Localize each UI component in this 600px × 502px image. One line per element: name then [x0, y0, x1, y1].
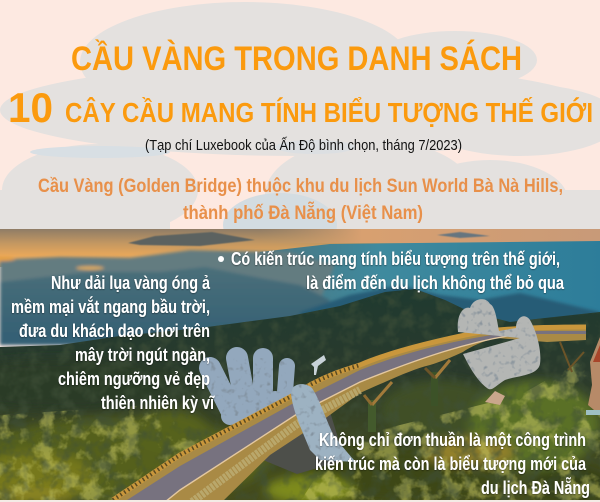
bottom edge: [0, 500, 600, 502]
bridge pillars: [364, 342, 584, 432]
deck: [124, 331, 586, 502]
text: left description: [11, 273, 215, 413]
islands: [128, 232, 490, 246]
lower slopes: [0, 376, 600, 500]
foliage texture: [0, 289, 600, 502]
photo: golden bridge landscape: [0, 229, 600, 502]
subtitle: thành phố Đà Nẵng (Việt Nam): [183, 201, 423, 224]
text: bottom right description: [315, 430, 590, 498]
text: left description: mây trời ngút ngàn,: [75, 345, 210, 365]
foliage highlights: [0, 350, 600, 502]
text: top right description: [218, 249, 565, 293]
text: left description: thiên nhiên kỳ vĩ: [101, 393, 215, 413]
right cliff structure: [586, 337, 600, 415]
right hand: [458, 299, 540, 405]
background clouds: [0, 2, 600, 257]
source note: (Tạp chí Luxebook của Ấn Độ bình chọn, tháng 7/2023): [145, 137, 462, 154]
distant mountains: [0, 250, 600, 345]
title line 1: CẦU VÀNG TRONG DANH SÁCH: [71, 40, 522, 78]
text: left description: đưa du khách dạo chơi trên: [19, 321, 210, 341]
text: left description: chiêm ngưỡng vẻ đẹp: [58, 369, 210, 389]
small building: [311, 355, 326, 375]
bridge underside and lower rail: [113, 327, 586, 502]
text: left description: Như dải lụa vàng óng ả: [51, 273, 211, 293]
deck edge line: [165, 334, 520, 502]
lattice: [192, 390, 360, 502]
bridge: [113, 327, 586, 502]
left hand fingers and palm: [210, 358, 287, 416]
left hand palm below bridge: [264, 414, 339, 474]
text: left description: mềm mại vắt ngang bầu trời,: [11, 296, 210, 317]
left hand thumb over bridge: [291, 384, 356, 462]
dark green hills: [0, 289, 600, 502]
sea: [260, 241, 600, 313]
sky: [0, 229, 412, 267]
subtitle: [38, 176, 563, 224]
title line 2: 10: [8, 84, 53, 131]
top rail: [113, 327, 586, 500]
title line 2: [8, 84, 593, 131]
